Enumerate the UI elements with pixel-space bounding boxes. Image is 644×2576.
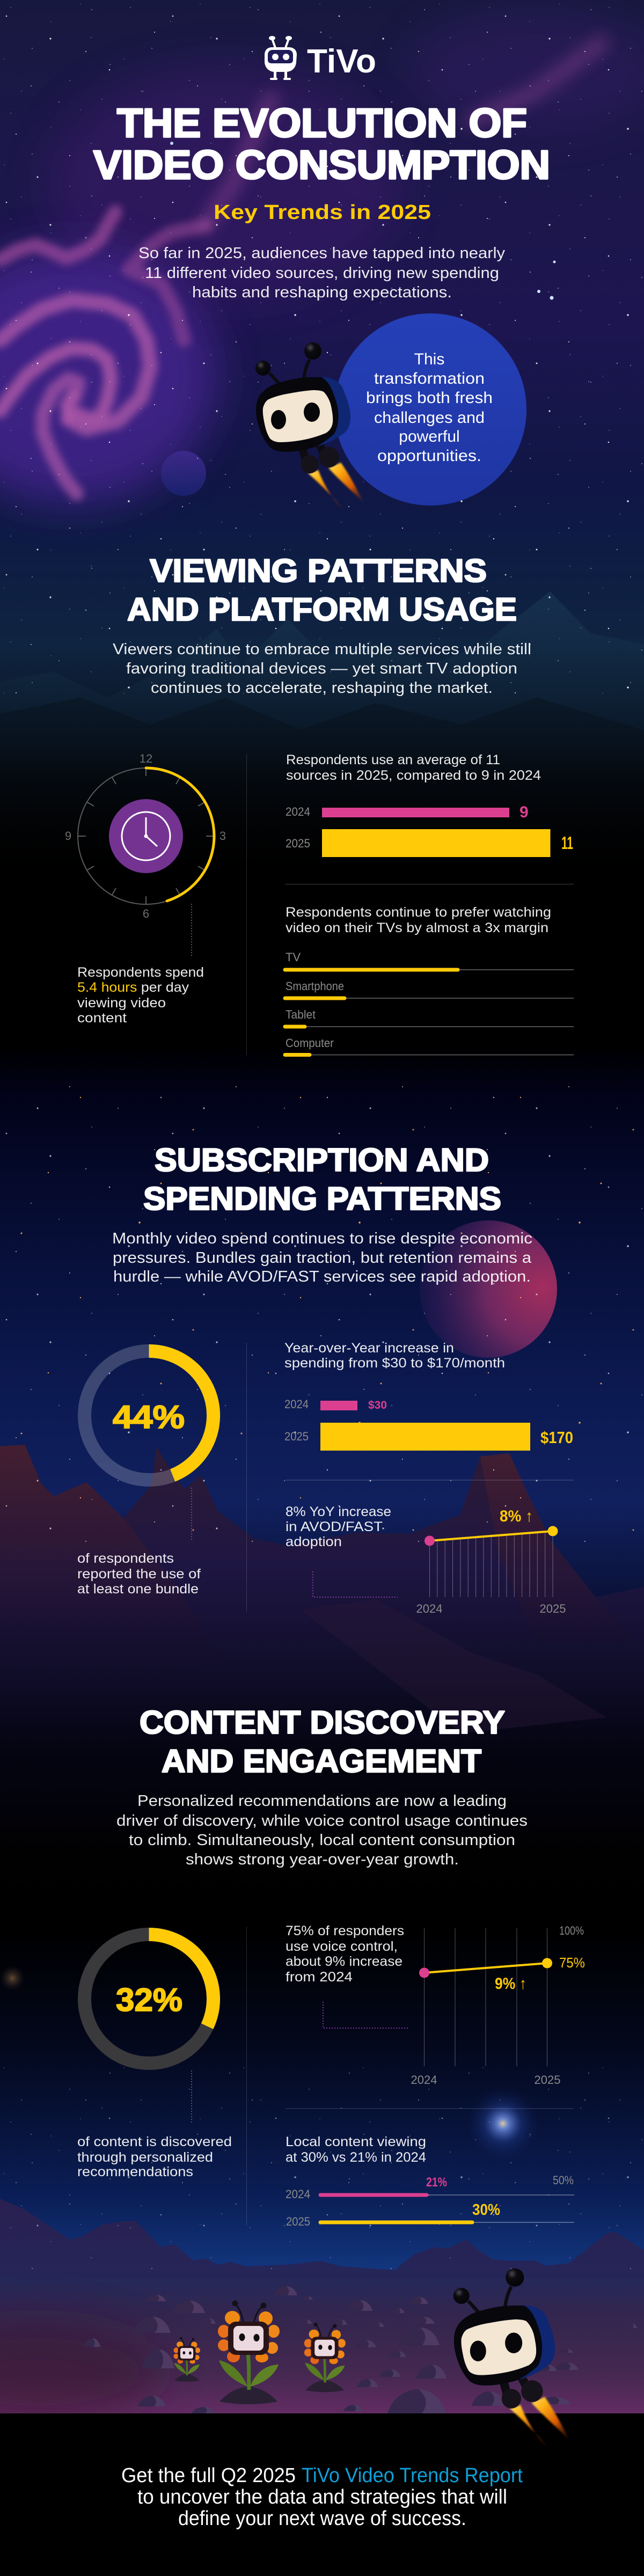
- robot mascot with jets: bottom: [453, 2268, 570, 2449]
- decorative connector: [323, 2002, 408, 2028]
- callout circle: transformation: [374, 370, 485, 387]
- bar chart: sources: 11: [561, 833, 573, 853]
- text: voice control: from 2024: [286, 1970, 353, 1985]
- paragraph: subscription: pressures. Bundles gain traction, but retention remains a: [113, 1249, 532, 1267]
- text: sources: sources in 2025, compared to 9 in 2024: [286, 768, 541, 783]
- footer band: [0, 2413, 644, 2576]
- robot mascot with jets: [255, 342, 365, 511]
- callout circle: opportunities.: [377, 447, 481, 465]
- callout circle: challenges and: [374, 409, 485, 427]
- bar chart: local content: 21%: [426, 2175, 447, 2190]
- intro paragraph: So far in 2025, audiences have tapped into nearly: [138, 245, 506, 262]
- bar chart: spending: 2024: [284, 1397, 309, 1411]
- stat text: bundle: reported the use of: [77, 1567, 201, 1582]
- bar chart: local content: 2025: [286, 2215, 310, 2228]
- text: spending: [284, 1341, 505, 1371]
- small planet: [161, 451, 206, 496]
- donut chart: 44%: 44%: [113, 1399, 185, 1435]
- decorative connector: [313, 1571, 398, 1597]
- intro paragraph: [138, 245, 506, 301]
- background: nebula glow: [0, 11, 644, 504]
- stat text: hours per day: content: [77, 1011, 127, 1026]
- bar chart: devices: [283, 950, 574, 1055]
- paragraph: content discovery: Personalized recommendations are now a leading: [137, 1792, 507, 1810]
- stat text: recommendations: [77, 2134, 232, 2179]
- text: voice control: about 9% increase: [286, 1954, 402, 1969]
- column divider: [246, 754, 247, 1055]
- paragraph: content discovery: to climb. Simultaneously, local content consumption: [129, 1832, 515, 1849]
- text: AVOD: [286, 1504, 391, 1549]
- line chart: AVOD: 2024: [416, 1602, 442, 1615]
- ground shading: [0, 2324, 161, 2420]
- line chart: voice control: 2024: [411, 2073, 437, 2087]
- bar chart: spending: $170: [540, 1428, 573, 1447]
- mountains: section 2: [0, 1445, 644, 1803]
- bar chart: local content: [286, 2174, 574, 2228]
- row divider: [286, 883, 574, 884]
- stat text: recommendations: recommendations: [77, 2164, 193, 2179]
- flower: small: [173, 2337, 200, 2382]
- decorative connector: [191, 2070, 192, 2124]
- callout circle: brings both fresh: [366, 389, 493, 407]
- stat text: recommendations: through personalized: [77, 2150, 213, 2165]
- bar chart: sources: 2025: [286, 837, 310, 850]
- paragraph: viewing patterns: favoring traditional devices — yet smart TV adoption: [126, 660, 517, 677]
- line chart: AVOD: 8% ↑: [500, 1507, 533, 1525]
- bar chart: sources: 2024: [286, 805, 310, 818]
- bar chart: devices: Smartphone: [286, 979, 344, 993]
- text: sources: Respondents use an average of 11: [286, 752, 500, 767]
- paragraph: content discovery: driver of discovery, while voice control usage continues: [116, 1812, 528, 1829]
- column divider: [246, 1927, 247, 2226]
- clock chart: 9: [65, 829, 71, 843]
- bar chart: spending: [284, 1397, 573, 1451]
- bar chart: local content: 30%: [472, 2201, 500, 2219]
- logo icon: [265, 36, 297, 80]
- text: spending: Year-over-Year increase in: [284, 1341, 454, 1356]
- clock chart: [65, 752, 226, 920]
- footer call to action: Get the full Q2 2025: [121, 2464, 296, 2487]
- intro paragraph: habits and reshaping expectations.: [192, 284, 452, 301]
- column divider: [246, 1343, 247, 1612]
- planet: section 2: [420, 1220, 557, 1358]
- line chart: voice control: 100%: [559, 1924, 584, 1937]
- bar chart: sources: 9: [519, 803, 529, 821]
- footer call to action: [121, 2464, 523, 2530]
- text: voice control: 75% of responders: [286, 1923, 404, 1938]
- clock chart: 6: [143, 907, 149, 920]
- text: voice control: use voice control,: [286, 1939, 398, 1954]
- text: local content: [286, 2134, 426, 2165]
- text: spending: spending from $30 to $170/month: [284, 1356, 505, 1371]
- rocks: [84, 2286, 637, 2414]
- paragraph: subscription: Monthly video spend continues to rise despite economic: [112, 1230, 532, 1247]
- icon: clock: [109, 799, 183, 873]
- heading: subscription: SUBSCRIPTION AND: [155, 1142, 489, 1178]
- bar chart: devices: TV: [286, 950, 301, 964]
- logo wordmark: TiVo: [307, 43, 376, 80]
- donut chart: 32%: 32%: [116, 1982, 182, 2018]
- line chart: voice control: [411, 1924, 585, 2087]
- decorative connector: [191, 1488, 192, 1540]
- line chart: AVOD: 2025: [540, 1602, 566, 1615]
- flower: medium: [304, 2323, 346, 2392]
- text: voice control: [286, 1923, 404, 1985]
- text: local content: at 30% vs 21% in 2024: [286, 2150, 426, 2165]
- text: AVOD: adoption: [286, 1534, 342, 1549]
- heading: viewing patterns: VIEWING PATTERNS: [150, 553, 487, 589]
- row divider: [286, 2108, 574, 2109]
- callout circle: [334, 313, 526, 506]
- bar chart: devices: Tablet: [286, 1008, 316, 1021]
- bar chart: devices: Computer: [286, 1036, 334, 1050]
- clock chart: 3: [219, 829, 226, 843]
- donut chart: 44%: [85, 1351, 214, 1480]
- mountains: bottom: [0, 2199, 644, 2287]
- heading: viewing patterns: [127, 553, 517, 627]
- bar chart: spending: 2025: [284, 1430, 309, 1443]
- ground: [0, 2278, 644, 2413]
- subtitle: Key Trends in 2025: [214, 201, 431, 224]
- footer call to action: to uncover the data and strategies that will: [137, 2486, 507, 2508]
- paragraph: viewing patterns: continues to accelerate, reshaping the market.: [151, 679, 493, 697]
- stat text: bundle: [77, 1551, 201, 1597]
- paragraph: subscription: hurdle — while AVOD/FAST services see rapid adoption.: [113, 1268, 531, 1285]
- title: THE EVOLUTION OF: [117, 100, 527, 145]
- paragraph: subscription: [112, 1230, 532, 1285]
- star glow: section 3: [0, 1965, 540, 2161]
- intro paragraph: 11 different video sources, driving new spending: [145, 265, 499, 282]
- paragraph: viewing patterns: [113, 641, 531, 697]
- paragraph: viewing patterns: Viewers continue to embrace multiple services while still: [113, 641, 531, 658]
- title: VIDEO CONSUMPTION: [93, 142, 550, 187]
- spiral galaxy: [0, 300, 150, 494]
- line chart: voice control: 9% ↑: [495, 1975, 526, 1993]
- heading: viewing patterns: AND PLATFORM USAGE: [127, 591, 517, 627]
- callout circle: This: [414, 350, 444, 368]
- text: AVOD: 8% YoY increase: [286, 1504, 391, 1519]
- row divider: [286, 1480, 574, 1481]
- stat text: hours per day: 5.4 hours per day: [77, 980, 189, 995]
- footer call to action: define your next wave of success.: [178, 2507, 466, 2530]
- flower: large: [218, 2300, 280, 2404]
- decorative connector: [191, 904, 192, 957]
- stat text: hours per day: [77, 965, 204, 1026]
- clock chart: 12: [140, 752, 152, 765]
- paragraph: content discovery: shows strong year-over-year growth.: [186, 1851, 459, 1868]
- bar chart: local content: 50%: [553, 2174, 574, 2187]
- stat text: bundle: at least one bundle: [77, 1582, 199, 1597]
- footer call to action: TiVo Video Trends Report: [302, 2464, 523, 2487]
- line chart: voice control: 2025: [535, 2073, 560, 2087]
- text: devices: [286, 905, 551, 935]
- text: AVOD: in AVOD/FAST: [286, 1519, 383, 1534]
- text: local content: Local content viewing: [286, 2134, 426, 2149]
- paragraph: content discovery: [116, 1792, 528, 1868]
- bar chart: sources: [286, 803, 573, 857]
- heading: subscription: SPENDING PATTERNS: [143, 1181, 501, 1217]
- stat text: recommendations: of content is discovered: [77, 2134, 232, 2149]
- donut chart: 32%: [85, 1934, 214, 2063]
- mountains: section 1: [0, 591, 644, 859]
- heading: content discovery: AND ENGAGEMENT: [162, 1743, 481, 1779]
- stat text: hours per day: Respondents spend: [77, 965, 204, 980]
- text: devices: Respondents continue to prefer watching: [286, 905, 551, 920]
- stat text: hours per day: viewing video: [77, 996, 166, 1011]
- stat text: bundle: of respondents: [77, 1551, 174, 1566]
- heading: content discovery: [140, 1704, 505, 1779]
- text: devices: video on their TVs by almost a 3x margin: [286, 920, 548, 935]
- bar chart: local content: 2024: [286, 2187, 310, 2201]
- callout circle: powerful: [399, 428, 460, 445]
- title: [93, 100, 550, 187]
- heading: content discovery: CONTENT DISCOVERY: [140, 1704, 505, 1740]
- heading: subscription: [143, 1142, 501, 1217]
- line chart: AVOD: [416, 1507, 566, 1615]
- text: sources: [286, 752, 541, 783]
- logo: [265, 36, 376, 80]
- line chart: voice control: 75%: [559, 1955, 585, 1971]
- bar chart: spending: $30: [368, 1399, 387, 1411]
